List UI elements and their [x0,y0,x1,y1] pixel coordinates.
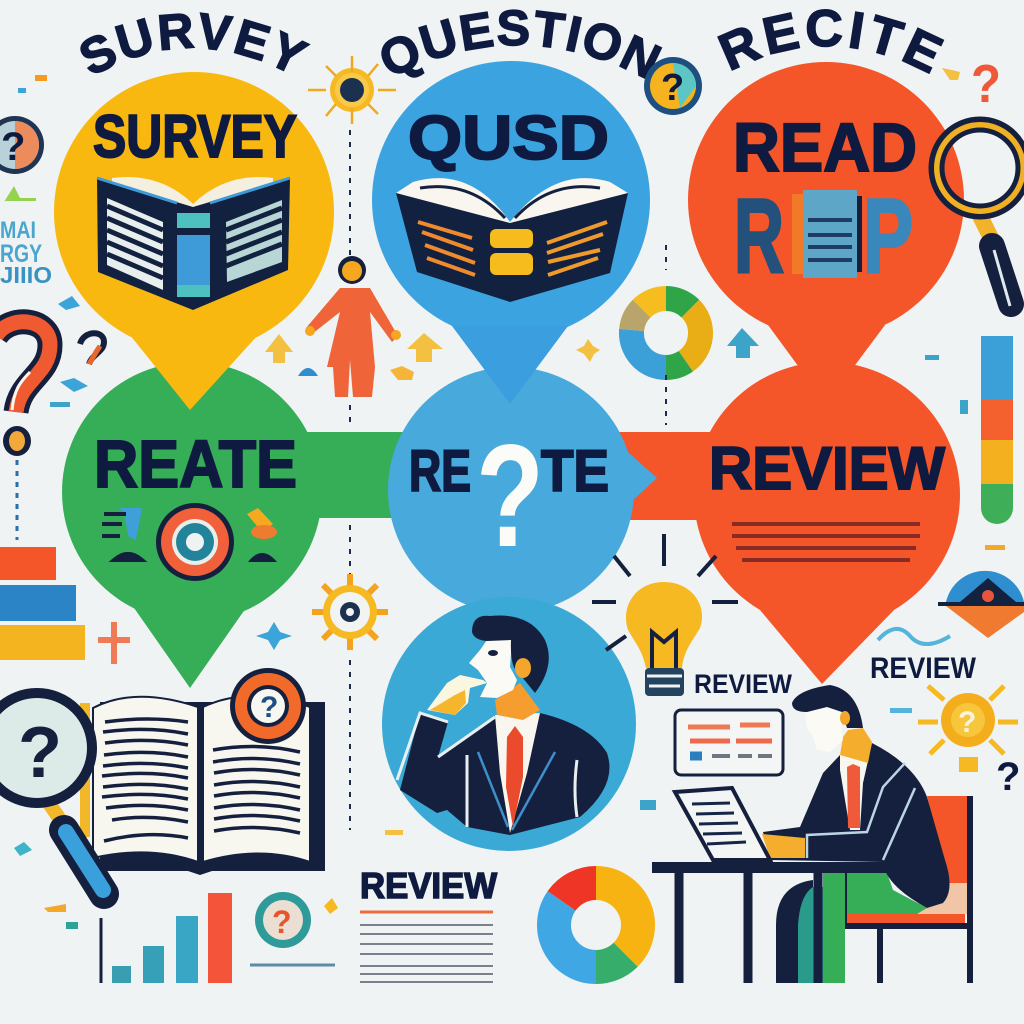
hair [472,616,549,693]
face [805,707,843,752]
hair [792,685,863,728]
torso [763,743,950,908]
neck [495,683,540,720]
icon: small figure left [102,508,142,560]
icon: large magnifier top right [932,120,1024,306]
hand [427,675,487,715]
icon: yellow splash top right [942,68,960,80]
icon: sun badge right [918,686,1018,772]
illustration: open book lower left [80,696,325,875]
text line orange [360,910,493,914]
ear [515,658,531,678]
label: r: R [734,178,784,295]
heading: recite: RECITE [717,9,944,74]
hand [762,834,805,858]
icon: figure standing [305,256,401,397]
shirt [840,743,872,830]
label: review right: REVIEW [870,652,977,685]
illustration: thinking man [397,616,609,835]
panel: blue question pin [372,61,650,404]
icon: question badge bottom: ? [272,904,292,940]
icon: blue swoosh [878,629,950,644]
icon: thermometer bar [981,336,1013,524]
neck [840,728,872,763]
dashed line centre right [665,245,667,425]
text: small left words [0,217,52,288]
label: re: RE [409,439,471,504]
label: reate: REATE [94,427,297,502]
laptop screen [675,788,770,860]
panel: yellow survey pin [54,72,334,410]
text: small left words: RGY [0,240,42,268]
lapels [478,752,555,830]
face [469,640,517,698]
icon: question mark top right: ? [971,54,1001,114]
panel: red read pin [688,62,964,404]
icon: star yellow [576,339,600,362]
icon: magnifier lower left: ? [18,713,62,793]
lapel and sleeve lines [807,763,915,860]
trousers teal [798,887,823,983]
label: review bottom: REVIEW [360,865,497,906]
icon: question right: ? [996,755,1020,799]
desk [652,862,888,873]
chart: donut bottom [554,883,638,967]
icon: small question [80,333,104,364]
label: qusd: QUSD [408,104,609,173]
text lines [732,524,920,560]
dashed line left [16,460,18,540]
icon: blue star [256,622,292,650]
label: p: P [863,178,913,295]
icon: arrow blue [727,328,759,358]
icon: big question left [0,322,50,456]
icon: sun top centre [308,56,396,124]
eye [488,650,498,656]
seat bar [847,914,965,924]
icon: magnifier lower left [0,693,104,894]
chair seat cushion [900,883,967,914]
tie [847,764,860,828]
icon: lightbulb [592,534,738,696]
panel: blue recite circle [388,367,657,613]
icon: question badge left [0,116,44,174]
heading: question: QUESTION [381,9,662,79]
chart: bars bottom left [101,893,232,983]
label: review middle: REVIEW [694,669,792,699]
panel: orange connector band [610,432,740,520]
icon: ankh cross [98,622,130,664]
dashed line centre left [349,130,351,830]
shirt [495,713,540,833]
decorative caption line [250,964,335,966]
icon: presentation board [675,710,783,775]
icon: small orange splash [390,366,414,380]
tie [506,726,523,827]
label: read: READ [733,109,917,186]
trousers green [823,873,845,983]
chair back [927,796,967,883]
icon: question mark: ? [476,414,544,577]
desk legs [679,873,818,983]
panel: green connector band [300,432,410,518]
legs [776,880,813,983]
icon: question badge on book: ? [260,691,278,724]
arrow tip into orange band [620,445,657,512]
text lines grey [360,925,493,982]
label: survey: SURVEY [93,103,297,170]
label: review: REVIEW [709,435,945,502]
icon: target [156,503,234,581]
text: small left words: MAI [0,217,36,244]
text: small left words: JIIIO [0,262,52,288]
icon: blurred book block [792,190,862,278]
laptop text lines [692,803,746,844]
icon: small green mark [4,186,36,202]
panel: red review pin [694,362,960,684]
icon: dome right [938,571,1024,638]
icon: arrow yellow right [407,333,443,362]
icon: small blue dome [298,368,318,376]
jacket [400,713,609,835]
icon: question badge left: ? [1,125,25,169]
hand shadow [430,690,466,715]
white lining [397,713,577,827]
icon: sun mid [312,574,388,650]
heading: survey: SURVEY [80,12,311,74]
icon: open book blue panel [396,178,628,302]
panel: blue thinker circle [382,597,636,851]
ear [840,711,850,725]
icon: question badge top [644,57,702,115]
icon: question badge on book [230,668,306,744]
icon: open book yellow panel [97,177,290,310]
illustration: man at desk [652,685,970,983]
icon: small figure right [247,508,277,562]
panel: green reate pin [62,362,322,688]
icon: question badge top: ? [661,67,684,109]
icon: sun badge right: ? [958,706,976,739]
green seat [845,873,927,914]
chart: stacked bars left [0,547,85,660]
icon: donut top centre [631,298,701,368]
icon: question badge bottom [255,892,311,948]
icon: arrow yellow [265,334,293,363]
chair frame [844,796,970,983]
label: te: TE [541,439,609,504]
